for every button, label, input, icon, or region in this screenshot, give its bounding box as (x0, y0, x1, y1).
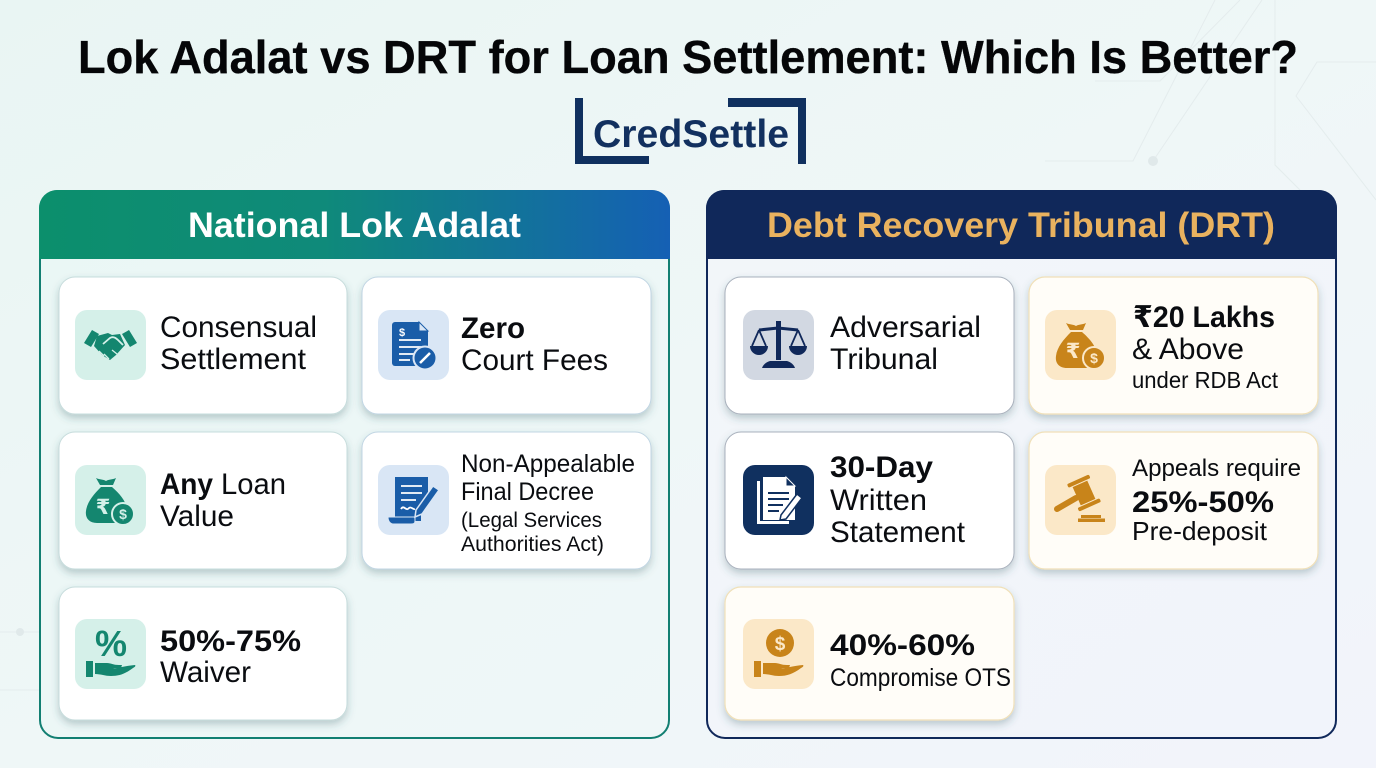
card: 50%-75% Waiver (59, 587, 347, 720)
icon: signed scroll (378, 465, 449, 535)
card: Adversarial Tribunal (725, 277, 1014, 414)
icon: percent on hand: % (95, 623, 127, 664)
icon: gold money bag (1045, 310, 1116, 380)
card: Any Loan Value: Value (160, 500, 234, 533)
logo: CredSettle: CredSettle (593, 113, 789, 156)
icon: written statement (743, 465, 814, 535)
card: 20 Lakhs and Above (1029, 277, 1318, 414)
icon: handshake (75, 310, 146, 380)
title: Lok Adalat vs DRT for Loan Settlement: Which Is Better? (78, 31, 1298, 83)
icon: money bag: ₹ (96, 496, 110, 519)
card: Appeals require 25%-50% Pre-deposit: Pre-deposit (1132, 516, 1268, 546)
icon: scales of justice (743, 310, 814, 380)
panel header: National Lok Adalat (39, 190, 670, 259)
card: Consensual Settlement: Settlement (160, 343, 307, 376)
card: Zero Court Fees (362, 277, 651, 414)
icon: money bag (75, 465, 146, 535)
card: Zero Court Fees: Court Fees (461, 344, 608, 377)
card: Any Loan Value: Loan (221, 468, 286, 501)
card: Appeals require 25%-50% Pre-deposit: 25%-50% (1132, 486, 1274, 519)
card: 20 Lakhs and Above: ₹20 Lakhs (1133, 301, 1275, 334)
card: 50%-75% Waiver: 50%-75% (160, 625, 301, 658)
card: Non-Appealable Final Decree: Final Decree (461, 478, 594, 506)
card: Zero Court Fees: Zero (461, 312, 525, 345)
icon: money bag: $ (119, 506, 127, 522)
card: Non-Appealable Final Decree: Non-Appealable (461, 450, 635, 478)
icon: fee document (378, 310, 449, 380)
card: Consensual Settlement: Consensual (160, 311, 317, 344)
icon: percent on hand (75, 619, 146, 689)
card: Adversarial Tribunal: Tribunal (830, 343, 938, 376)
card: Any Loan Value: Any (160, 468, 213, 501)
icon: gavel (1045, 465, 1116, 535)
panel header: Debt Recovery Tribunal (DRT) (706, 190, 1337, 259)
card: 20 Lakhs and Above: under RDB Act (1132, 367, 1279, 393)
card: 40%-60% Compromise OTS: 40%-60% (830, 629, 975, 662)
icon: gold money bag: ₹ (1066, 340, 1080, 363)
panel header: National Lok Adalat: National Lok Adalat (188, 206, 521, 245)
card: 30-Day Written Statement: Written (830, 484, 927, 517)
icon: coin on hand (743, 619, 814, 689)
panel: Debt Recovery Tribunal (706, 190, 1337, 738)
card: Adversarial Tribunal: Adversarial (830, 311, 981, 344)
panel header: Debt Recovery Tribunal (DRT): Debt Recovery Tribunal (DRT) (767, 206, 1275, 245)
card: 20 Lakhs and Above: & Above (1132, 333, 1244, 366)
card: 40%-60% Compromise OTS: Compromise OTS (830, 664, 1011, 692)
card: Any Loan Value (59, 432, 347, 569)
panel: National Lok Adalat (39, 190, 670, 738)
card: Non-Appealable Final Decree: (Legal Services (461, 508, 602, 532)
card: Non-Appealable Final Decree (362, 432, 651, 569)
card: 30-Day Written Statement: Statement (830, 516, 966, 549)
card: 30-Day Written Statement: 30-Day (830, 451, 933, 484)
icon: coin on hand: $ (775, 634, 786, 655)
card: 40%-60% Compromise OTS (725, 587, 1014, 720)
card: Non-Appealable Final Decree: Authorities Act) (461, 532, 604, 556)
icon: gold money bag: $ (1090, 350, 1098, 366)
card: Consensual Settlement (59, 277, 347, 414)
logo: CredSettle (575, 98, 806, 164)
card: 50%-75% Waiver: Waiver (160, 656, 251, 689)
icon: fee document: $ (399, 327, 405, 339)
card: Appeals require 25%-50% Pre-deposit (1029, 432, 1318, 569)
card: 30-Day Written Statement (725, 432, 1014, 569)
card: Appeals require 25%-50% Pre-deposit: Appeals require (1132, 455, 1301, 482)
